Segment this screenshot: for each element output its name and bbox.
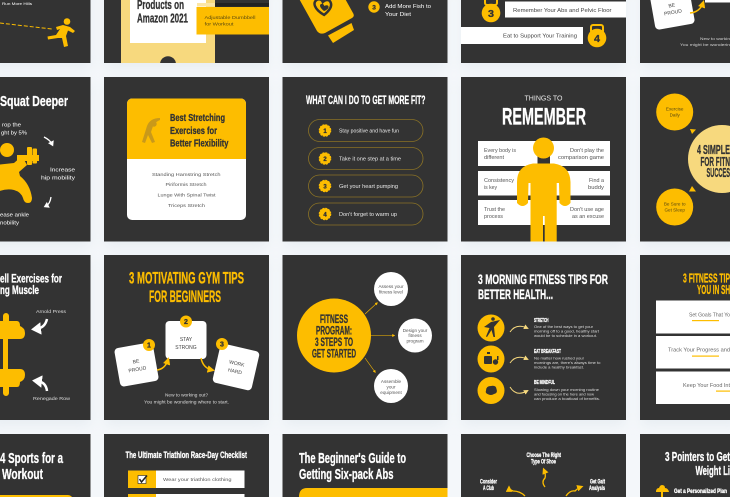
tip 2: EAT BREAKFAST	[534, 349, 561, 355]
heading: REMEMBER	[502, 104, 586, 130]
title	[478, 271, 608, 302]
title: The Ultimate Triathlon Race-Day Checklist	[126, 450, 248, 461]
tip 2: mornings are, there's always time to	[534, 360, 600, 365]
product label: for Workout	[204, 22, 234, 26]
tip 3: can produce a boatload of benefits.	[534, 396, 600, 401]
card 2	[656, 336, 730, 368]
caption	[144, 393, 229, 404]
left label	[480, 478, 497, 492]
text: renegade row: Renegade Row	[33, 396, 71, 402]
row 2	[128, 494, 244, 497]
panel: fitness program	[282, 255, 448, 420]
text: hip mobility	[41, 168, 75, 182]
tip 2: No matter how rushed your	[534, 356, 585, 360]
item 3	[308, 175, 423, 197]
badge 2: 2	[184, 319, 188, 326]
panel: sports workout	[0, 434, 90, 497]
badge 2	[180, 316, 192, 328]
left notes	[484, 148, 517, 220]
tip 3: Slowing down your morning routine	[534, 387, 599, 392]
phone	[121, 0, 215, 63]
panel: morning tips	[461, 255, 626, 420]
heading: ell Exercises for	[0, 272, 62, 286]
node 1: fitness level	[379, 290, 403, 294]
kettlebell 3: 3	[488, 9, 494, 20]
caption: New to workin	[700, 37, 730, 41]
panel: gym tips partial	[640, 0, 730, 63]
central circle: PROGRAM:	[316, 326, 352, 338]
figure	[517, 138, 570, 242]
text: ankle mobility	[0, 212, 29, 226]
yellow band	[0, 495, 73, 497]
stretch list: Piriformis Stretch	[166, 182, 207, 188]
tip 2: include a healthy breakfast.	[534, 364, 584, 370]
row 1	[128, 470, 244, 488]
text: drop the weight: ght by 5%	[1, 130, 27, 136]
caption: You might be wondering where to start.	[144, 399, 229, 404]
tip 1: would be to schedule in a workout.	[534, 333, 597, 338]
right notes: Don't play the	[570, 148, 604, 154]
panel: fitness tips in shape	[640, 255, 730, 420]
strip: training: Eat to Support Your Training	[503, 34, 577, 40]
stretch list: Standing Hamstring Stretch	[152, 172, 221, 178]
right label: Get Gait	[590, 478, 605, 485]
left notes: is key	[484, 185, 498, 191]
card: be proud: PROUD	[664, 8, 683, 17]
card 3	[656, 372, 730, 404]
kettlebell 4	[588, 25, 606, 47]
item 2: Take it one step at a time	[339, 156, 401, 162]
central circle	[297, 298, 371, 372]
caption: New to working out?	[165, 393, 209, 398]
left label: A Club	[483, 485, 494, 492]
central circle: FITNESS	[320, 314, 348, 326]
panel: squat deeper	[0, 77, 90, 242]
node 2	[398, 318, 432, 352]
arrow	[690, 3, 703, 13]
icon: squat person	[0, 143, 39, 203]
item 2	[308, 148, 423, 170]
text: ankle mobility: nobility	[0, 220, 19, 226]
text: drop the weight	[1, 122, 27, 136]
yellow band	[299, 488, 448, 497]
kettlebell 3	[482, 0, 500, 22]
heading: Squat Deeper	[0, 94, 68, 110]
card: be proud: BE	[668, 2, 676, 10]
item 3: Get your heart pumping	[339, 184, 398, 190]
left label: Consider	[480, 478, 497, 485]
badge 3: 3	[220, 342, 224, 348]
title	[129, 270, 244, 306]
panel: weight loss	[640, 434, 730, 497]
central circle: GET STARTED	[312, 348, 356, 360]
panel: fitness success	[640, 77, 730, 242]
heading: Workout	[2, 466, 43, 483]
node 2: program	[406, 338, 424, 344]
right notes: Don't use age	[570, 207, 604, 213]
strip: abs: Remember Your Abs and Pelvic Floor	[513, 8, 612, 14]
text: drop the weight: rop the	[2, 122, 21, 128]
rows	[478, 141, 610, 225]
tip 3: and focusing on the here and now	[534, 391, 594, 396]
icon	[656, 485, 669, 497]
node: sleep: Get Sleep	[664, 208, 685, 212]
title	[137, 0, 188, 26]
tip 1: morning off to a good, healthy start	[534, 328, 600, 334]
item 4: 4	[323, 212, 327, 218]
icon: heart bottle	[297, 0, 354, 43]
card 1: BE	[132, 358, 141, 366]
node: sleep	[656, 188, 693, 226]
title: FOR BEGINNERS	[149, 288, 221, 306]
path: dashed trail	[0, 23, 52, 29]
connectors	[365, 303, 394, 372]
arrow	[566, 487, 581, 496]
panel: stretching	[104, 77, 269, 242]
icon: runner	[48, 18, 75, 47]
left notes: Consistency	[484, 178, 515, 184]
panel: products on amazon	[104, 0, 269, 63]
panel: dumbbell exercises	[0, 255, 90, 420]
kicker: THINGS TO	[524, 96, 563, 102]
text	[385, 4, 431, 18]
right notes: buddy	[588, 185, 605, 191]
central circle: 3 STEPS TO	[315, 337, 353, 349]
central circle	[688, 125, 730, 193]
heading	[299, 450, 406, 483]
heading	[0, 450, 63, 483]
heading: Getting Six-pack Abs	[299, 466, 394, 483]
title: 3 MORNING FITNESS TIPS FOR	[478, 271, 608, 287]
card 2: STAY	[180, 337, 193, 343]
panel: running shoes	[461, 434, 626, 497]
card 3: HARD	[227, 367, 243, 376]
tip 1: STRETCH	[534, 318, 549, 324]
right notes	[558, 148, 605, 220]
title: WHAT CAN I DO TO GET MORE FIT?	[306, 93, 426, 107]
panel: get more fit	[282, 77, 448, 242]
text: hip mobility: hip mobility	[41, 176, 75, 182]
caption	[680, 37, 730, 47]
card title: Exercises for	[170, 125, 217, 137]
top label: Choose The Right	[526, 452, 562, 459]
node 1	[374, 272, 408, 306]
card	[127, 98, 246, 220]
left notes: different	[484, 155, 505, 161]
node 2: Design your	[403, 328, 428, 333]
arrow: white	[37, 381, 47, 391]
right label: Analysis	[589, 485, 605, 492]
tip 3	[478, 377, 600, 404]
right notes: as an excuse	[572, 214, 604, 220]
item 1: Stay positive and have fun	[339, 128, 399, 134]
badge 3: 3	[372, 4, 376, 12]
card 3: WORK	[228, 359, 246, 369]
node: exercise daily: Daily	[670, 112, 681, 118]
right label	[589, 478, 605, 492]
icon: dumbbell	[0, 313, 25, 396]
tip 1	[478, 314, 600, 342]
card 2: Track Your Progress and	[668, 348, 730, 354]
tip 3: BE MINDFUL	[534, 380, 555, 386]
strip: training	[461, 27, 583, 44]
right notes: Find a	[589, 178, 604, 184]
card 3	[212, 343, 260, 391]
badge 1	[143, 339, 155, 351]
title: BETTER HEALTH...	[478, 286, 553, 302]
card: be proud	[649, 0, 695, 30]
panel: core and training	[461, 0, 626, 63]
top label	[526, 452, 562, 466]
node 3	[374, 369, 408, 403]
tip 2	[478, 346, 600, 372]
item 2: 2	[323, 157, 327, 163]
card 2: STRONG	[175, 345, 197, 351]
badge 3	[368, 1, 380, 13]
badge 3	[216, 338, 228, 350]
card title	[170, 112, 229, 150]
node: exercise daily	[656, 94, 693, 130]
badge 1: 1	[147, 342, 151, 350]
item 1	[308, 120, 423, 142]
strip: abs	[505, 2, 626, 18]
white card	[705, 0, 730, 2]
card 1	[114, 342, 159, 387]
title: 3 MOTIVATING GYM TIPS	[129, 270, 244, 288]
heading	[0, 272, 62, 297]
node: exercise daily: Exercise	[666, 106, 684, 112]
card 1	[656, 300, 730, 334]
arrow	[157, 360, 168, 370]
product label	[196, 3, 269, 34]
top label: Type Of Shoe	[531, 459, 556, 466]
heading: 4 Sports for a	[0, 450, 63, 467]
node 3: your	[387, 384, 396, 390]
panel: things to remember	[461, 77, 626, 242]
text: hip mobility: Increase	[50, 168, 75, 174]
tip 1: One of the best ways to get your	[534, 324, 594, 329]
card 1: PROUD	[128, 365, 147, 374]
panel: six-pack abs	[282, 434, 448, 497]
row 1: Wear your triathlon clothing	[163, 477, 232, 483]
node 1: Assess your	[378, 284, 404, 289]
item 4: Don't forget to warm up	[339, 212, 397, 218]
left notes: Every body is	[484, 148, 517, 154]
panel: triathlon checklist	[104, 434, 269, 497]
item 4	[308, 203, 423, 225]
arrow: white	[36, 319, 47, 329]
icon: stretching person	[142, 118, 160, 143]
arrow	[201, 358, 212, 370]
panel: run more hills	[0, 0, 90, 63]
card 2	[166, 321, 206, 359]
text: ankle mobility: ease ankle	[0, 212, 29, 218]
node 2: fitness	[408, 333, 422, 338]
card 3: Keep Your Food Int	[683, 383, 730, 389]
heading: ng Muscle	[0, 283, 39, 297]
item 1: 1	[323, 129, 327, 135]
card 1: Set Goals That Yo	[689, 312, 730, 318]
text: run more hills: Run More Hills	[2, 1, 32, 6]
panel: motivating gym tips	[104, 255, 269, 420]
product label: Adjustable Dumbbell	[204, 15, 256, 20]
pointers	[689, 129, 696, 192]
arrow	[46, 197, 51, 206]
left notes: Trust the	[484, 207, 505, 213]
right notes: comparison game	[558, 155, 604, 161]
kettlebell 4: 4	[594, 34, 600, 45]
heading	[665, 449, 730, 478]
node 3: Assemble	[381, 379, 402, 384]
node 3: equipment	[380, 390, 402, 395]
card title: Better Flexibility	[170, 138, 229, 150]
arrow	[543, 470, 545, 487]
arrow	[509, 488, 525, 496]
title	[683, 272, 730, 297]
stretch list: Lunge With Spinal Twist	[158, 193, 216, 199]
left notes: process	[484, 214, 504, 220]
panel: add more fish	[282, 0, 448, 63]
text: Your Diet	[385, 12, 411, 18]
arrow	[44, 137, 52, 144]
node: sleep: Be Sure to	[664, 202, 686, 206]
item 3: 3	[323, 184, 327, 190]
heading: The Beginner's Guide to	[299, 450, 406, 467]
text: arnold press: Arnold Press	[36, 309, 67, 315]
text: Add More Fish to	[385, 4, 431, 10]
card title: Best Stretching	[170, 112, 225, 124]
stretch list	[152, 172, 221, 209]
caption: You might be wonderin	[680, 43, 730, 47]
title: Amazon 2021	[137, 10, 188, 26]
stretch list: Triceps Stretch	[168, 203, 205, 209]
